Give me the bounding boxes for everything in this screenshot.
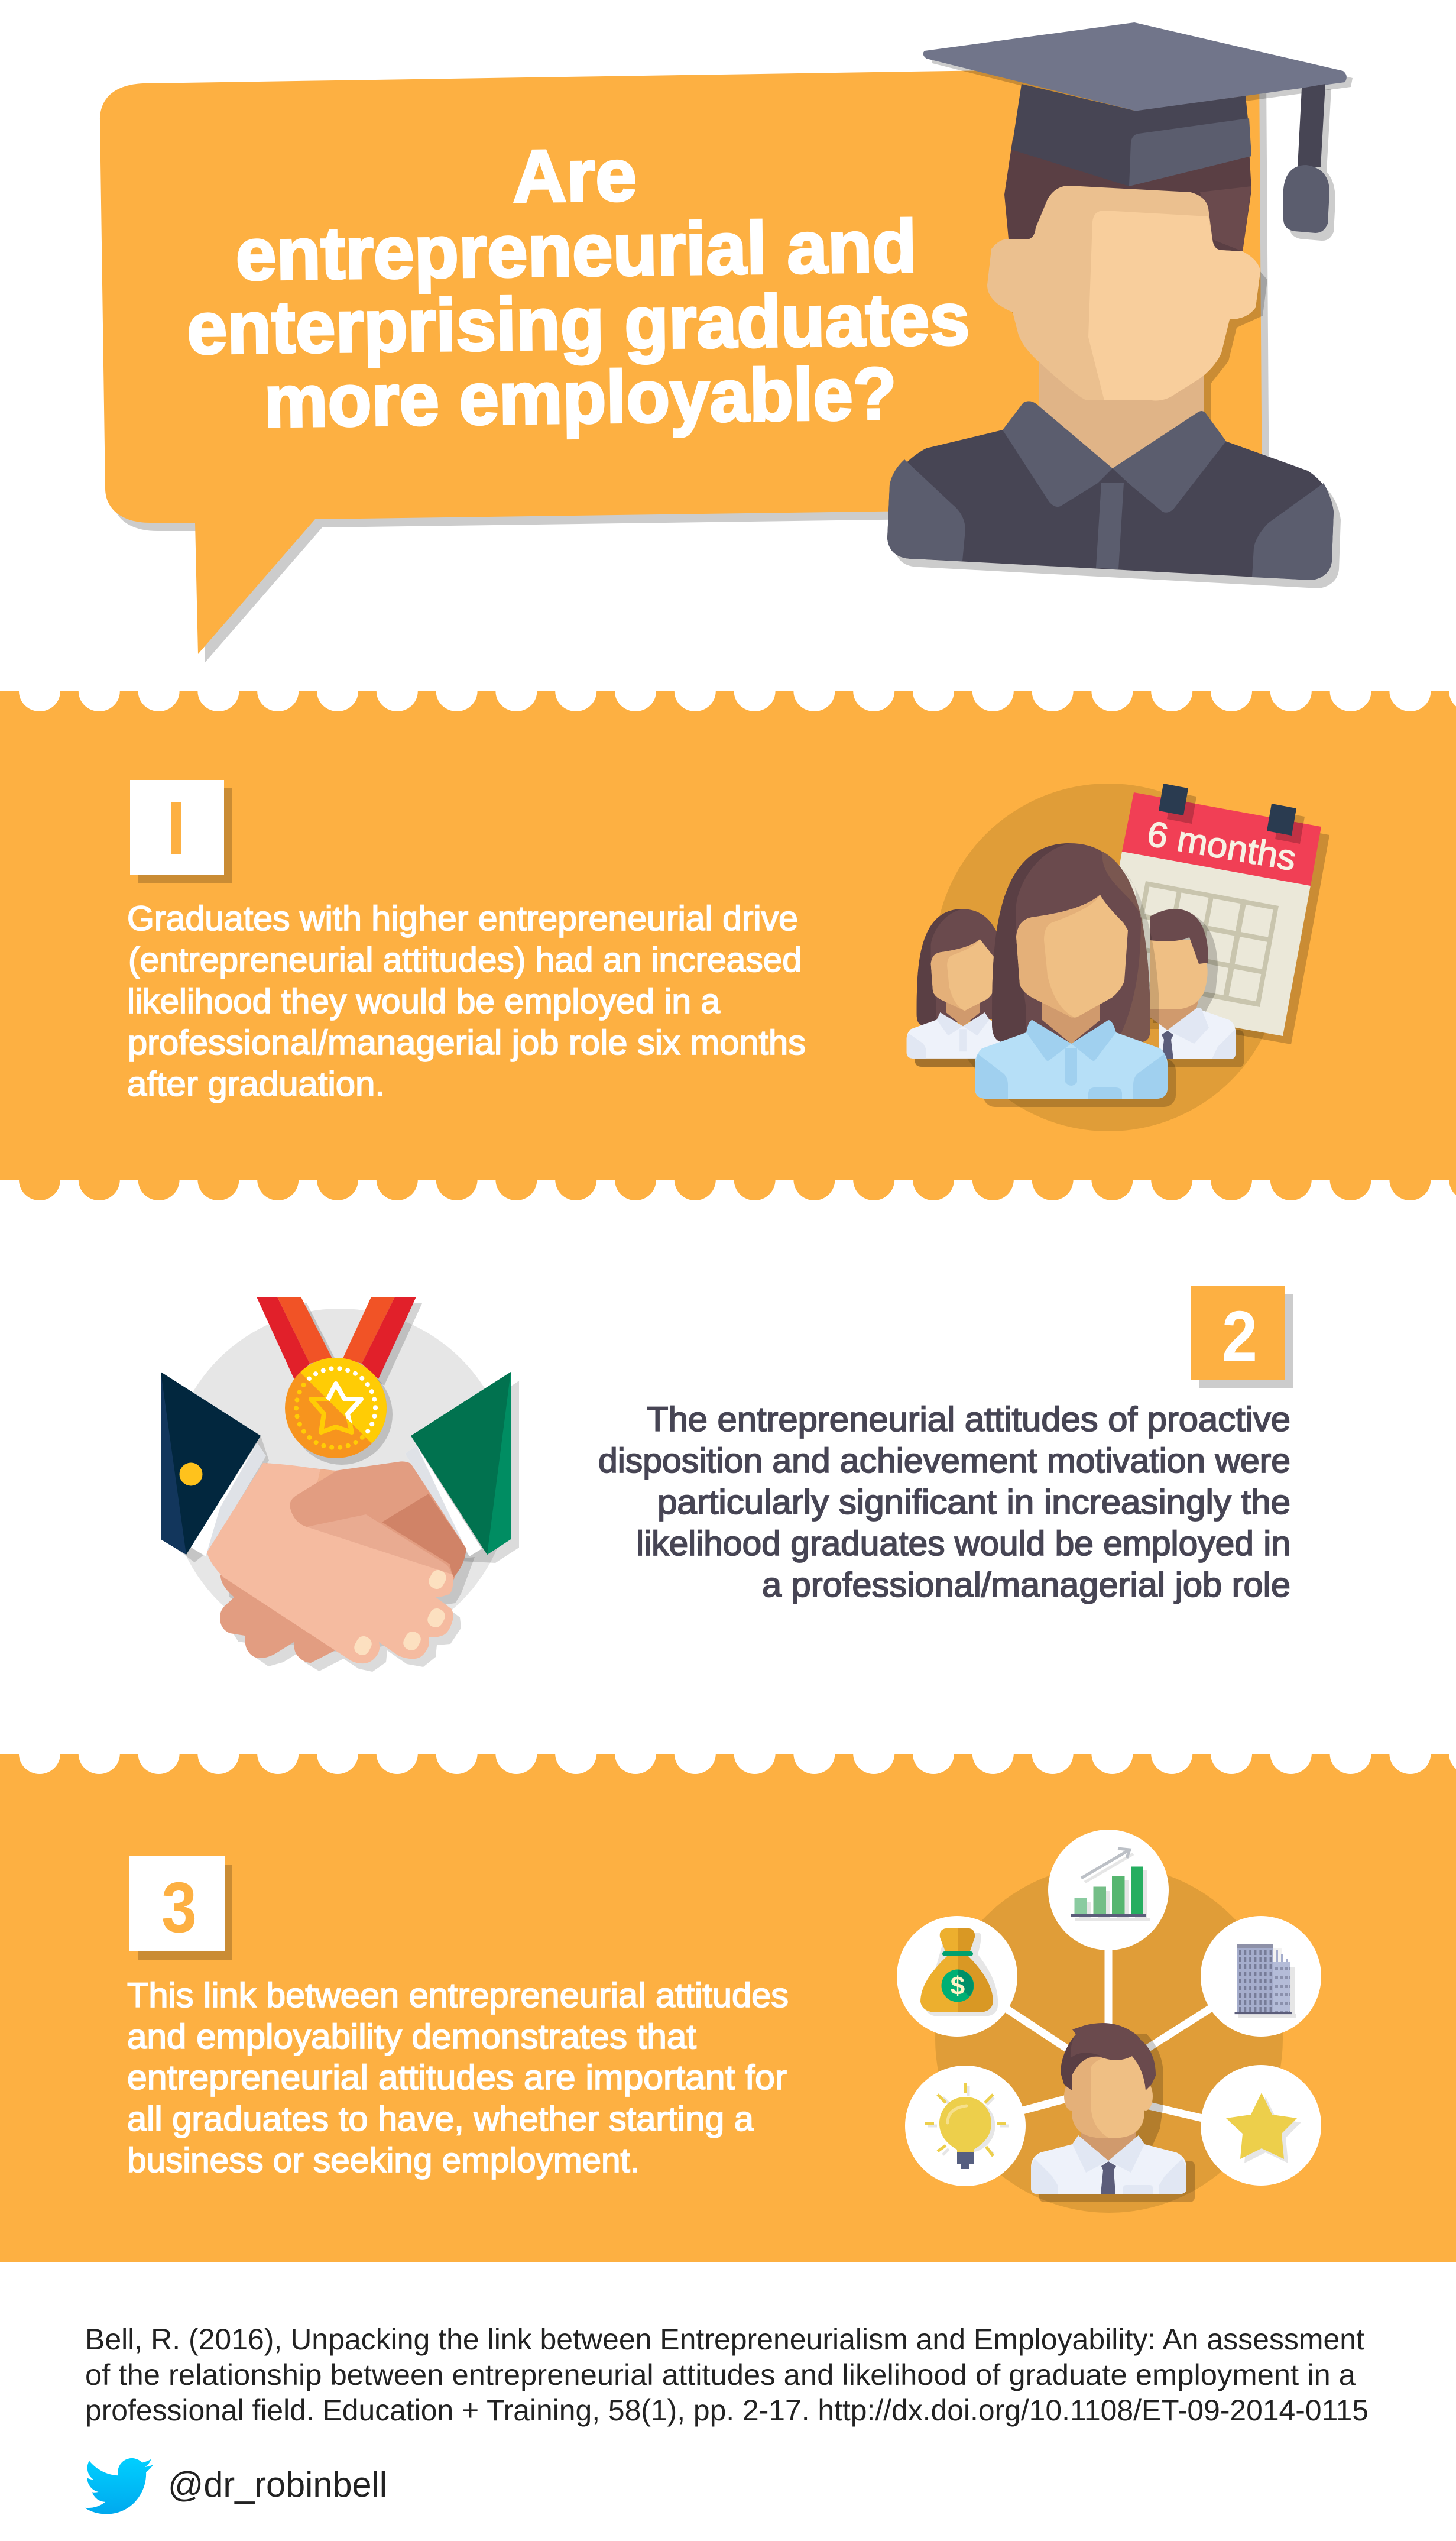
cuffs shadow bbox=[169, 1381, 519, 1563]
number box 3: 3 bbox=[161, 1867, 197, 1947]
connectors bbox=[957, 1890, 1261, 2132]
text: citation: Bell, R. (2016), Unpacking the link between Entrepreneurialism and Employability: An assessment bbox=[85, 2323, 1364, 2356]
text: finding 3: and employability demonstrates that bbox=[127, 2018, 696, 2056]
text: finding 2 bbox=[598, 1400, 1290, 1604]
panel: band 3 background bbox=[0, 1754, 1456, 2262]
text: finding 2: likelihood graduates would be employed in bbox=[636, 1524, 1290, 1563]
title: enterprising graduates bbox=[186, 278, 970, 370]
text: finding 1: Graduates with higher entrepreneurial drive bbox=[127, 899, 798, 938]
node: money bag bbox=[897, 1916, 1017, 2037]
icon: graduates and calendar bbox=[907, 784, 1329, 1131]
collar bbox=[1003, 401, 1113, 507]
left woman bbox=[907, 909, 1027, 1067]
text: finding 3: This link between entrepreneurial attitudes bbox=[127, 1976, 789, 2015]
right man bbox=[1150, 909, 1244, 1067]
text: finding 3: all graduates to have, whether starting a bbox=[127, 2100, 754, 2138]
neck bbox=[1042, 993, 1100, 1044]
title: more employable? bbox=[264, 352, 897, 442]
number box 2 bbox=[1191, 1286, 1293, 1388]
background circle bbox=[935, 784, 1282, 1131]
title: Are bbox=[512, 134, 637, 218]
text: finding 1 bbox=[127, 899, 806, 1103]
person bbox=[1031, 2023, 1195, 2202]
number box 3 bbox=[129, 1856, 232, 1960]
tassel bbox=[1298, 84, 1325, 167]
text: finding 2: a professional/managerial job role bbox=[762, 1566, 1290, 1604]
text: finding 1: likelihood they would be employed in a bbox=[127, 982, 721, 1021]
speech bubble bbox=[100, 66, 1269, 662]
node: growth chart bbox=[1048, 1830, 1169, 1950]
icon: network of skills bbox=[897, 1830, 1321, 2213]
back hand bbox=[266, 1461, 466, 1585]
node: buildings bbox=[1201, 1916, 1321, 2037]
nails bbox=[352, 1568, 449, 1658]
grey circle bbox=[168, 1309, 511, 1652]
background circle bbox=[935, 1865, 1283, 2213]
text: citation bbox=[85, 2323, 1369, 2427]
mortarboard bbox=[930, 27, 1353, 115]
center woman bbox=[975, 843, 1176, 1107]
icon: twitter bird bbox=[85, 2458, 153, 2514]
hair bbox=[1004, 139, 1251, 254]
title bbox=[184, 130, 971, 444]
graduate shadow bbox=[894, 257, 1341, 588]
text: finding 1: (entrepreneurial attitudes) had an increased bbox=[128, 941, 802, 979]
number box 2: 2 bbox=[1222, 1296, 1257, 1376]
calendar grid bbox=[1127, 881, 1279, 1007]
text: finding 2: The entrepreneurial attitudes of proactive bbox=[647, 1400, 1290, 1439]
thumb bbox=[290, 1471, 429, 1527]
ribbon bbox=[257, 1297, 422, 1386]
text: finding 1: professional/managerial job role six months bbox=[128, 1024, 806, 1062]
fingers shadow bbox=[228, 1557, 475, 1672]
calendar bbox=[1094, 784, 1329, 1044]
text: citation: professional field. Education + Training, 58(1), pp. 2-17. http://dx.doi.org/10.1108/ET-09-2014-0115 bbox=[85, 2394, 1369, 2427]
text: citation: of the relationship between entrepreneurial attitudes and likelihood of graduate employment in a bbox=[85, 2358, 1356, 2391]
text: finding 3 bbox=[127, 1976, 789, 2180]
text: finding 3: entrepreneurial attitudes are important for bbox=[127, 2058, 787, 2097]
text: finding 3: business or seeking employment. bbox=[127, 2141, 640, 2180]
number box 1: 1 bbox=[156, 789, 196, 869]
text: finding 1: after graduation. bbox=[127, 1065, 385, 1103]
node: light bulb bbox=[905, 2066, 1026, 2186]
jacket bbox=[887, 430, 1334, 580]
calendar label: 6 months bbox=[1144, 814, 1299, 878]
node: money bag: $ bbox=[951, 1972, 965, 2001]
panel: band 1 background bbox=[0, 691, 1456, 1200]
text: finding 2: particularly significant in increasingly the bbox=[657, 1483, 1290, 1522]
number box 1 bbox=[130, 780, 232, 883]
title: entrepreneurial and bbox=[235, 205, 917, 296]
face bbox=[1016, 895, 1128, 1018]
neck bbox=[1004, 355, 1204, 468]
right sleeve bbox=[405, 1372, 511, 1556]
medal bbox=[285, 1358, 393, 1465]
text: finding 2: disposition and achievement motivation were bbox=[598, 1442, 1290, 1480]
icon: handshake and medal bbox=[161, 1297, 519, 1672]
text: twitter handle: @dr_robinbell bbox=[168, 2465, 387, 2504]
front hand bbox=[207, 1463, 453, 1663]
node: star bbox=[1201, 2065, 1321, 2186]
icon: graduate bbox=[887, 22, 1353, 588]
face bbox=[987, 186, 1260, 400]
left sleeve bbox=[161, 1372, 266, 1556]
shirt bbox=[975, 1020, 1168, 1099]
